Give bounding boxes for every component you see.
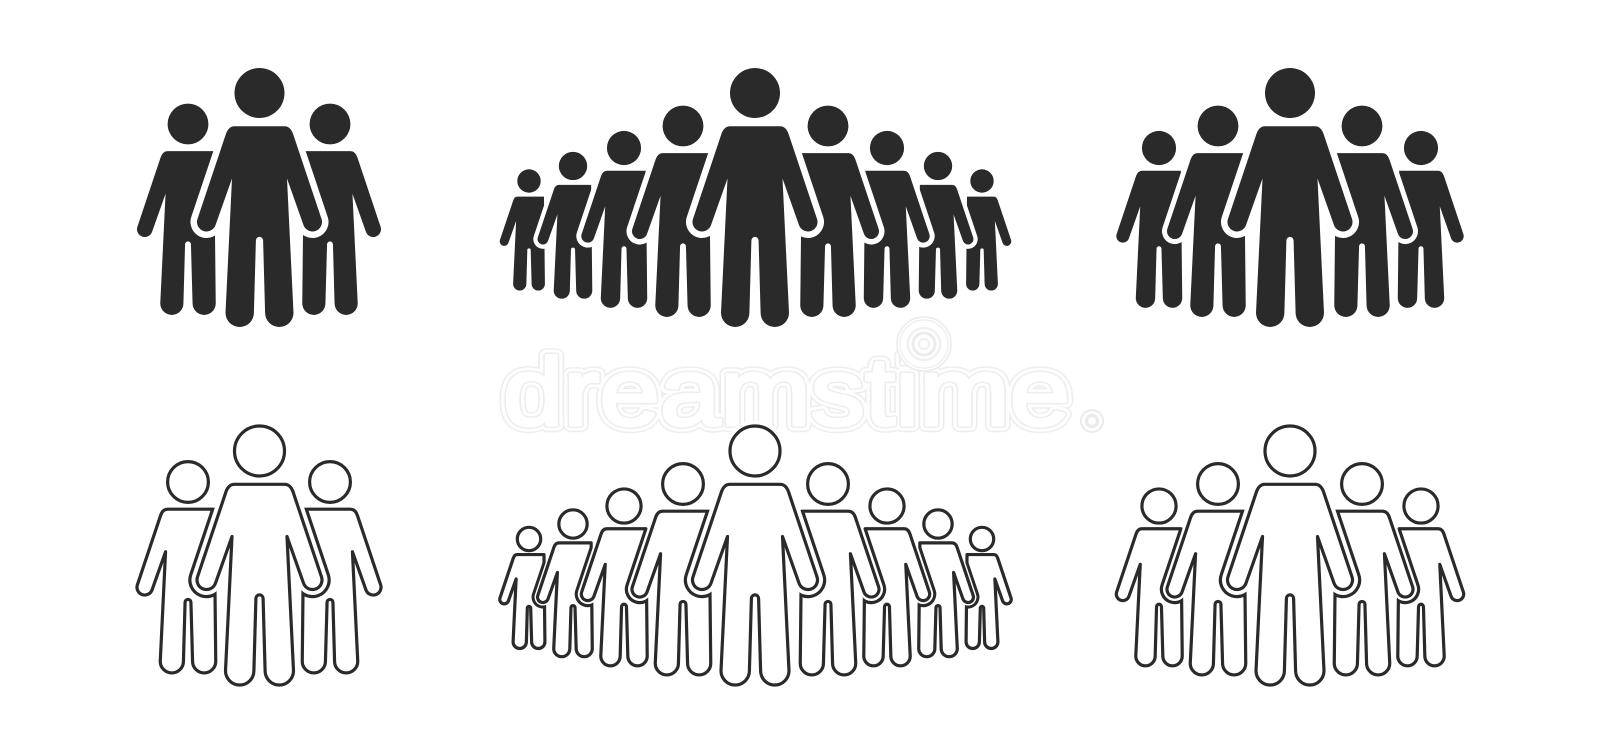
person: right 2 — [864, 131, 930, 308]
person: right 3 — [919, 152, 973, 299]
person: left 2 — [581, 489, 647, 666]
icon: outline group of three people — [137, 426, 381, 685]
person: left 2 — [581, 131, 647, 308]
person: centre — [692, 426, 818, 685]
watermark: dreamstime: dreamstime — [503, 339, 1070, 446]
icon: solid group of three people — [137, 68, 381, 327]
person: far right — [1398, 131, 1464, 308]
person: left 1 — [632, 106, 711, 317]
person: right — [1334, 106, 1413, 317]
person: far right — [1398, 489, 1464, 666]
person: centre — [197, 426, 322, 685]
person: right 3 — [919, 510, 973, 657]
person: left — [137, 462, 216, 673]
person: left — [1167, 106, 1246, 317]
person: centre — [1227, 426, 1353, 685]
person: left — [1167, 464, 1246, 675]
person: right — [302, 462, 381, 673]
icon: solid group of five people — [1116, 68, 1464, 327]
person: far right — [966, 169, 1011, 291]
person: left 3 — [538, 152, 592, 299]
person: left — [137, 104, 216, 315]
person: far right — [966, 527, 1011, 649]
person: left 1 — [632, 464, 711, 675]
person: right — [302, 104, 381, 315]
person: far left — [500, 527, 545, 649]
icon: outline group of five people — [1116, 426, 1464, 685]
person: right 2 — [864, 489, 930, 666]
person: left 3 — [538, 510, 592, 657]
icon: solid group of nine people — [500, 68, 1011, 327]
person: right — [1334, 464, 1413, 675]
person: far left — [500, 169, 545, 291]
watermark: dreamstime: dreamstime — [503, 339, 1070, 446]
person: far left — [1116, 489, 1182, 666]
icon: outline group of nine people — [500, 426, 1011, 685]
watermark: dreamstime: dreamstime — [503, 339, 1070, 446]
person: centre — [197, 68, 322, 327]
watermark: dreamstime: dreamstime — [503, 339, 1070, 446]
person: far left — [1116, 131, 1182, 308]
person: right 1 — [800, 464, 879, 675]
person: centre — [1227, 68, 1353, 327]
watermark: dreamstime — [503, 317, 1103, 446]
person: right 1 — [800, 106, 879, 317]
person: centre — [692, 68, 818, 327]
